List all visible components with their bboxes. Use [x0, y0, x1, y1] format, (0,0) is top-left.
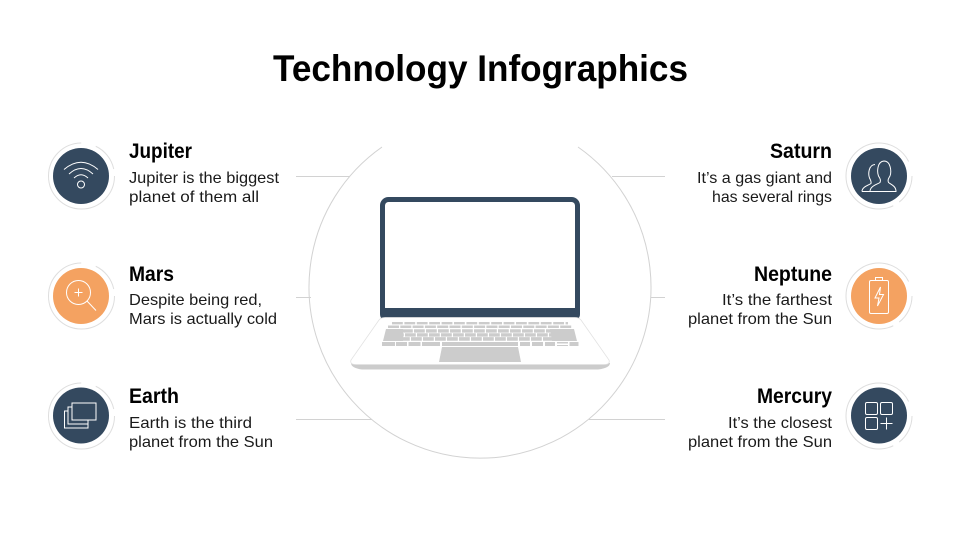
laptop bezel bottom: [380, 308, 580, 320]
laptop deck: [351, 318, 609, 364]
item: Neptune: [688, 263, 912, 329]
item: Jupiter: [48, 140, 280, 209]
text: Saturn description: It’s a gas giant and: [697, 170, 832, 187]
text: Saturn description: has several rings: [712, 189, 832, 206]
text: Jupiter description: planet of them all: [129, 189, 259, 206]
trackpad: [439, 347, 521, 362]
title: Technology Infographics: [273, 48, 688, 89]
connector lines: [296, 176, 665, 420]
item: Earth: [48, 383, 273, 451]
icon: laptop: [351, 200, 610, 370]
laptop screen: [382, 200, 578, 314]
icon: magnifier: [48, 263, 114, 329]
icon: layers: [48, 383, 114, 449]
central circle outline: [309, 147, 651, 458]
heading: Earth: Earth: [129, 385, 179, 408]
heading: Saturn: Saturn: [770, 140, 832, 163]
text: Jupiter description: Jupiter is the biggest: [129, 170, 280, 187]
text: Mars description: Despite being red,: [129, 292, 262, 309]
icon: wifi: [48, 143, 114, 209]
icon: apps grid: [846, 383, 912, 449]
text: Earth description: planet from the Sun: [129, 434, 273, 451]
keyboard: [382, 323, 578, 346]
text: Earth description: Earth is the third: [129, 415, 252, 432]
heading: Mars: Mars: [129, 263, 174, 286]
item: Mars: [48, 263, 277, 329]
icon: battery: [846, 263, 912, 329]
text: Neptune description: planet from the Sun: [688, 311, 832, 328]
icon: users: [846, 143, 912, 209]
text: Neptune description: It’s the farthest: [722, 292, 833, 309]
item: Saturn: [697, 140, 912, 209]
laptop base: [351, 363, 610, 370]
text: Mercury description: planet from the Sun: [688, 434, 832, 451]
text: Mars description: Mars is actually cold: [129, 311, 277, 328]
item: Mercury: [688, 383, 912, 451]
heading: Mercury: Mercury: [757, 385, 832, 408]
heading: Jupiter: Jupiter: [129, 140, 192, 163]
heading: Neptune: Neptune: [754, 263, 832, 286]
text: Mercury description: It’s the closest: [728, 415, 833, 432]
